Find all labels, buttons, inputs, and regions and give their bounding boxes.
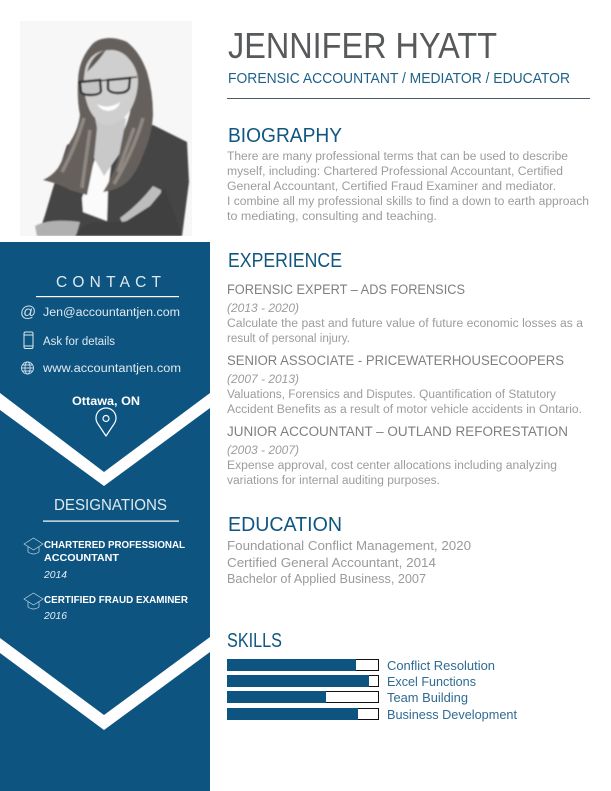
education list	[227, 539, 471, 586]
heading: skills: SKILLS	[227, 630, 282, 652]
designation: chartered professional accountant	[43, 539, 186, 581]
contact section	[20, 274, 181, 436]
heading: biography: BIOGRAPHY	[228, 125, 342, 147]
icon: at sign: @	[20, 304, 36, 321]
designations section	[24, 497, 188, 622]
job: senior associate	[227, 353, 582, 416]
heading: education: EDUCATION	[228, 514, 342, 536]
education list: Foundational Conflict Management, 2020	[227, 539, 471, 553]
contact phone: Ask for details	[43, 336, 115, 348]
skill: excel functions: Excel Functions	[387, 675, 476, 689]
skill: team building	[227, 691, 468, 705]
job: forensic expert: Calculate the past and future value of future economic losses as a	[227, 318, 584, 330]
skill: excel functions	[227, 675, 476, 689]
skill: conflict resolution: Conflict Resolution	[387, 659, 495, 673]
biography text: I combine all my professional skills to find a down to earth approach	[227, 196, 589, 208]
job: junior accountant	[227, 424, 568, 487]
job: junior accountant: Expense approval, cost center allocations including analyzing	[227, 460, 557, 472]
photo: portrait of Jennifer Hyatt	[34, 36, 190, 236]
biography text	[227, 151, 589, 223]
skill: business development	[227, 708, 518, 722]
icon: map pin	[96, 408, 116, 436]
lower chevron	[0, 637, 210, 730]
skill: team building: Team Building	[387, 691, 468, 705]
job: forensic expert: (2013 - 2020)	[227, 303, 299, 315]
job: junior accountant: (2003 - 2007)	[227, 445, 299, 457]
designations heading: DESIGNATIONS	[54, 497, 167, 514]
education list: Certified General Accountant, 2014	[227, 556, 436, 570]
job: forensic expert	[227, 282, 584, 345]
biography text: General Accountant, Certified Fraud Examiner and mediator.	[227, 181, 556, 193]
sidebar panel	[0, 242, 210, 791]
contact heading: CONTACT	[56, 274, 162, 291]
subtitle: FORENSIC ACCOUNTANT / MEDIATOR / EDUCATOR	[228, 71, 570, 87]
job: senior associate: Accident Benefits as a result of motor vehicle accidents in Ontario.	[227, 404, 582, 416]
job: junior accountant: variations for internal auditing purposes.	[227, 475, 440, 487]
designation: chartered professional accountant: ACCOUNTANT	[44, 552, 120, 564]
title: name: JENNIFER HYATT	[228, 25, 497, 66]
icon: phone	[24, 332, 33, 348]
designation: certified fraud examiner: 2016	[43, 610, 67, 622]
job: senior associate: Valuations, Forensics and Disputes. Quantification of Statutory	[227, 389, 556, 401]
skill: conflict resolution	[227, 659, 495, 673]
job: junior accountant: JUNIOR ACCOUNTANT – OUTLAND REFORESTATION	[227, 424, 568, 439]
biography text: to mediating, consulting and teaching.	[227, 211, 437, 223]
biography text: There are many professional terms that can be used to describe	[227, 151, 568, 163]
designation: certified fraud examiner: CERTIFIED FRAUD EXAMINER	[44, 594, 188, 606]
designation: chartered professional accountant: 2014	[43, 569, 67, 581]
job: forensic expert: result of personal injury.	[227, 333, 350, 345]
designation: chartered professional accountant: CHARTERED PROFESSIONAL	[44, 539, 186, 551]
job: senior associate: (2007 - 2013)	[227, 374, 299, 386]
skill: business development: Business Development	[387, 708, 518, 722]
skills bar chart	[227, 659, 518, 722]
location: Ottawa, ON	[72, 394, 140, 408]
heading: experience: EXPERIENCE	[228, 250, 342, 272]
icon: graduation cap	[24, 593, 43, 609]
biography text: myself, including: Chartered Professional Accountant, Certified	[227, 166, 563, 178]
contact email: Jen@accountantjen.com	[43, 307, 180, 319]
icon: graduation cap	[24, 538, 43, 554]
job: forensic expert: FORENSIC EXPERT – ADS FORENSICS	[227, 282, 465, 297]
education list: Bachelor of Applied Business, 2007	[227, 572, 426, 586]
contact website: www.accountantjen.com	[42, 363, 181, 375]
designation: certified fraud examiner	[43, 594, 188, 622]
icon: globe	[22, 362, 34, 374]
job: senior associate: SENIOR ASSOCIATE - PRICEWATERHOUSECOOPERS	[227, 353, 564, 368]
